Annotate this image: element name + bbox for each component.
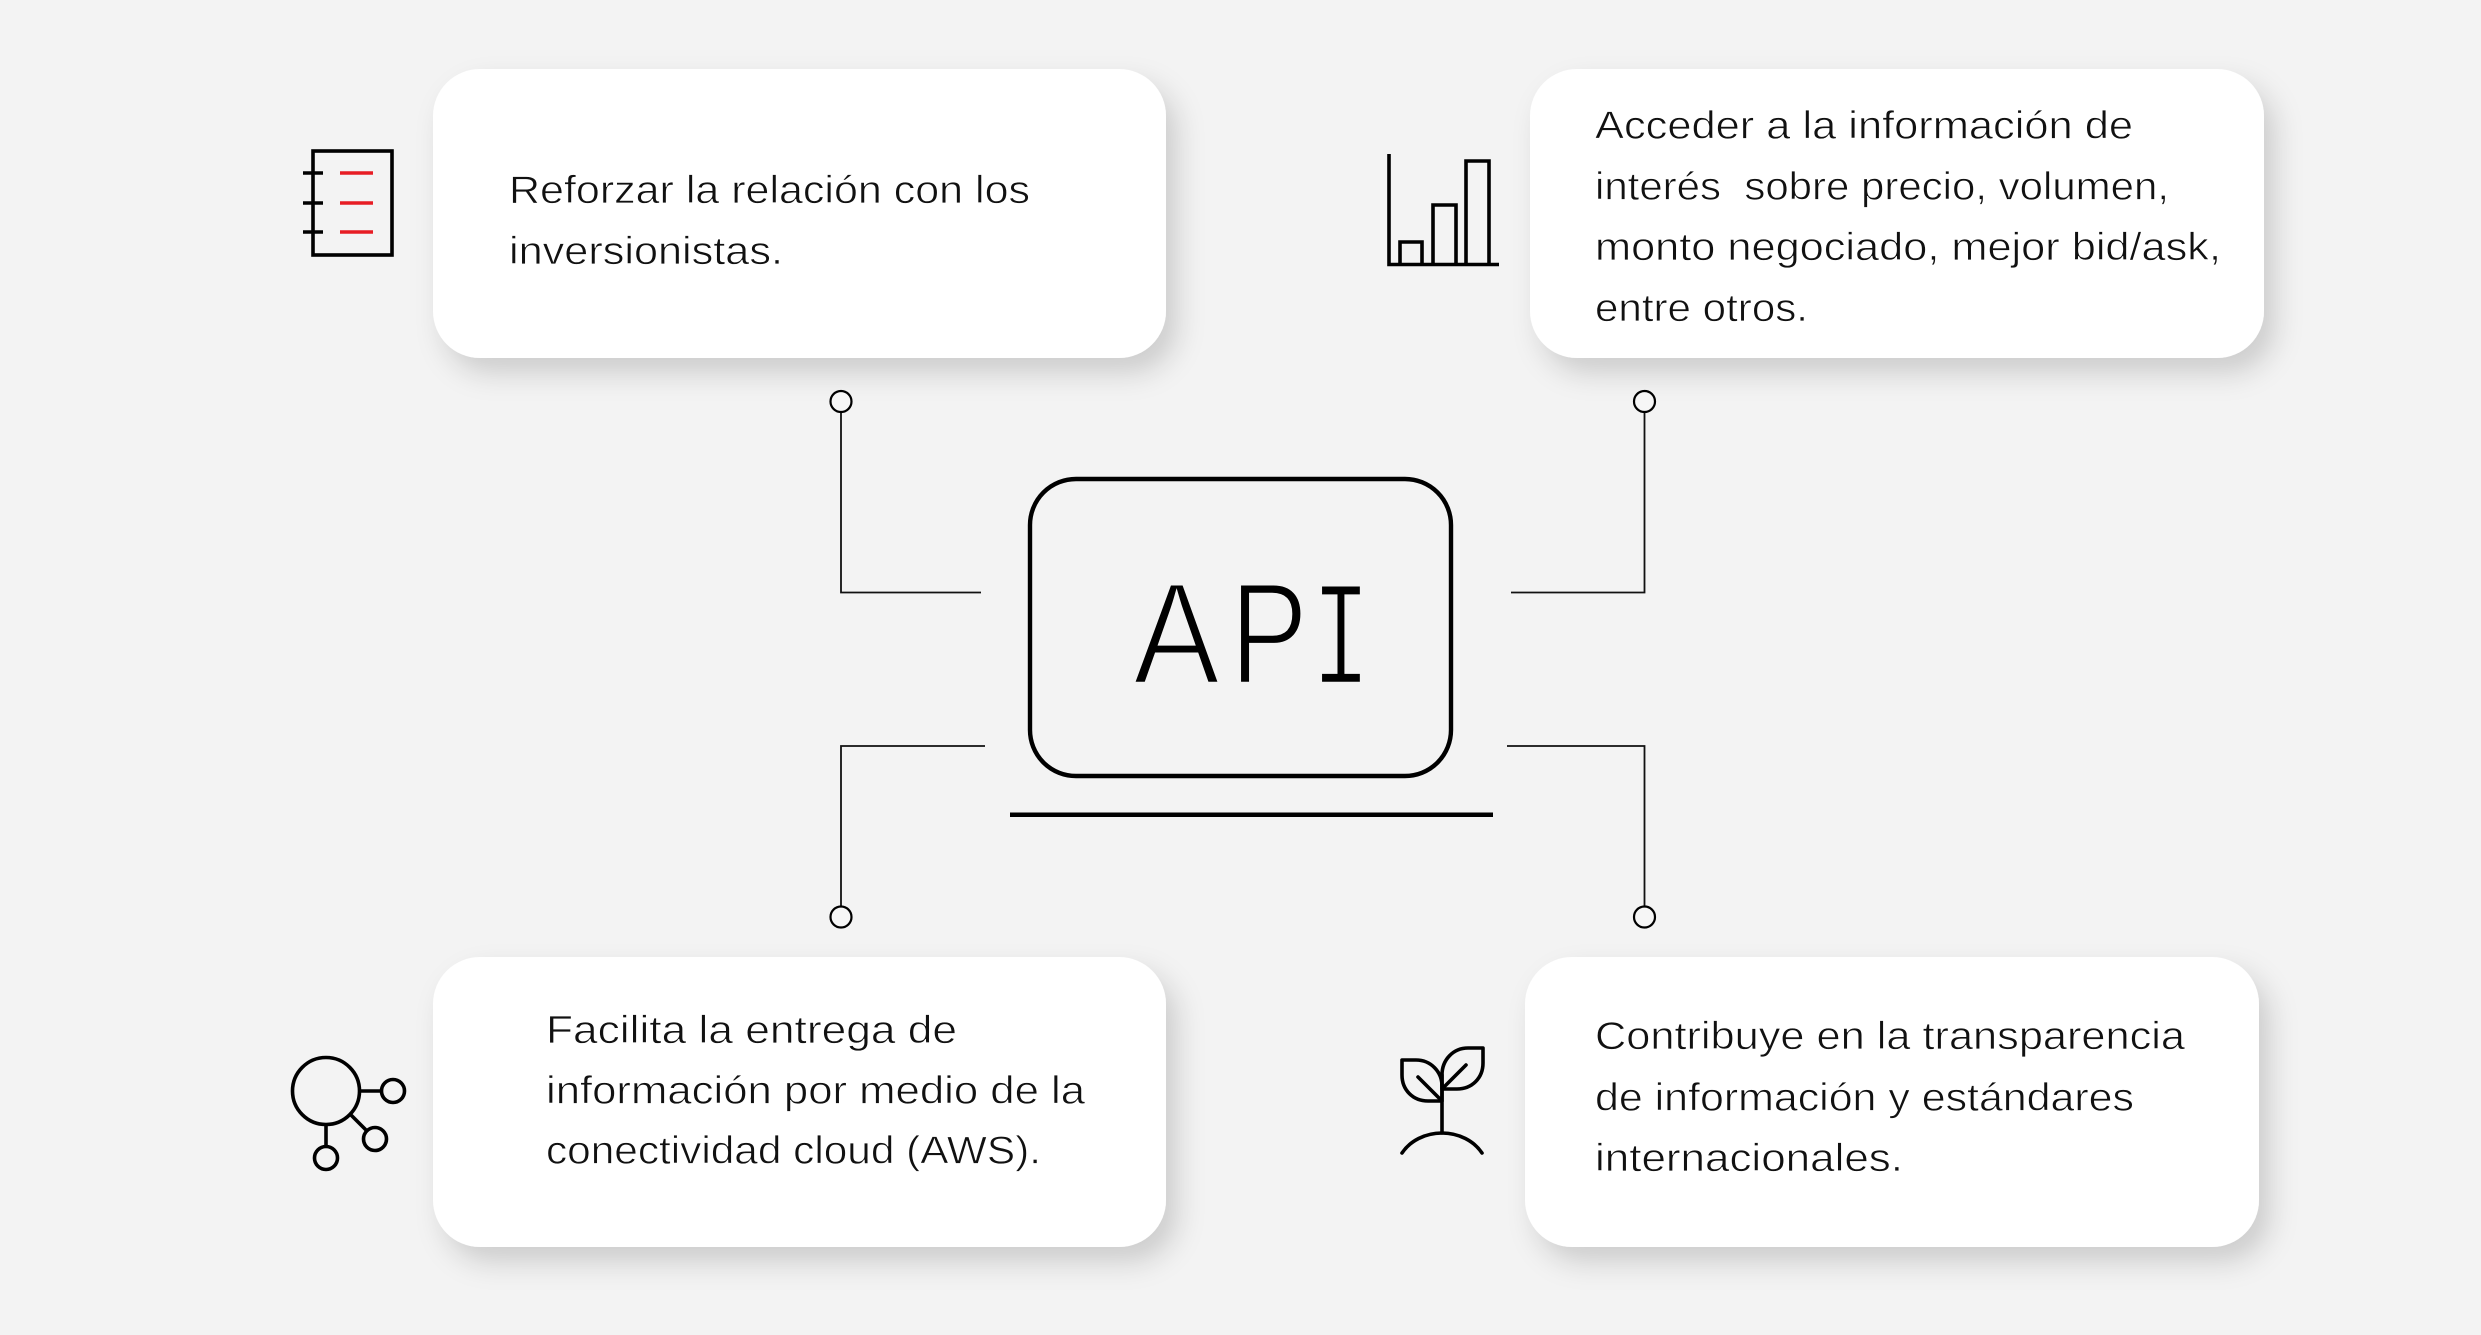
card text — [509, 169, 1030, 273]
card text: conectividad cloud (AWS). — [546, 1130, 1041, 1172]
card text: Facilita la entrega de — [546, 1009, 957, 1052]
API label — [1133, 552, 1371, 730]
underline below API box — [1010, 812, 1493, 817]
card text: internacionales. — [1595, 1137, 1903, 1180]
icon: bar chart — [1389, 154, 1499, 264]
connector: bottom left — [830, 746, 985, 928]
central API box — [1030, 479, 1451, 776]
panel: facilita entrega — [433, 957, 1166, 1247]
panel: reforzar relacion — [433, 69, 1166, 358]
card text: entre otros. — [1595, 287, 1808, 330]
card text: información por medio de la — [546, 1070, 1085, 1112]
panel: contribuye transparencia — [1525, 957, 2259, 1247]
card background — [433, 69, 1166, 358]
box outline — [1030, 479, 1451, 776]
panel: acceder informacion — [1530, 69, 2264, 358]
API label: A — [1133, 552, 1220, 714]
icon: notebook — [303, 151, 392, 255]
card background — [1525, 957, 2259, 1247]
card text: Acceder a la información de — [1595, 104, 2133, 148]
card text: inversionistas. — [509, 230, 783, 273]
icon: sprout — [1402, 1048, 1483, 1153]
card text — [1595, 104, 2221, 330]
connector: top right — [1511, 391, 1655, 592]
card text: monto negociado, mejor bid/ask, — [1595, 226, 2221, 269]
card text — [546, 1009, 1085, 1172]
connector: top left — [830, 391, 981, 592]
card text: Contribuye en la transparencia — [1595, 1015, 2185, 1058]
icon: network nodes — [292, 1058, 404, 1170]
card text — [1595, 1015, 2185, 1180]
connector: bottom right — [1507, 746, 1655, 928]
API label: P — [1230, 552, 1308, 714]
card background — [1530, 69, 2264, 358]
card background — [433, 957, 1166, 1247]
card text: interés sobre precio, volumen, — [1595, 166, 2169, 208]
API label: I — [1311, 560, 1371, 730]
card text: de información y estándares — [1595, 1076, 2134, 1120]
card text: Reforzar la relación con los — [509, 169, 1030, 212]
